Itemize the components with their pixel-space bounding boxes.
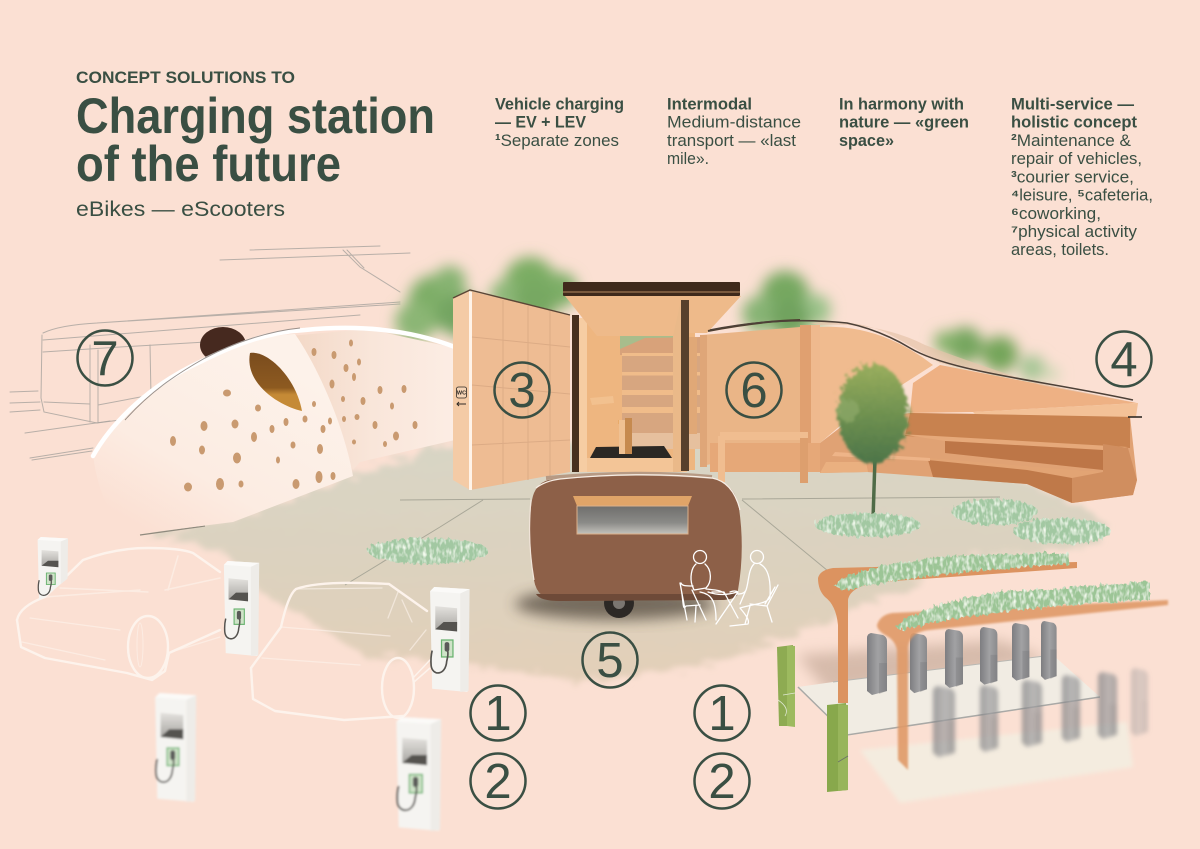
text column: intermodal: mile».: [667, 149, 709, 168]
canopy two: [877, 600, 1168, 770]
text column: multi-service: ³courier service,: [1011, 167, 1134, 186]
numbered marker 5: 5: [596, 634, 624, 688]
numbered marker 3: 3: [508, 364, 536, 418]
green bike chargers: [777, 645, 848, 792]
rear platform: [798, 655, 1100, 735]
numbered marker 2 left: [470, 754, 526, 809]
text column: multi-service: ⁴leisure, ⁵cafeteria,: [1011, 186, 1153, 205]
numbered marker 6: [726, 362, 782, 418]
text column: intermodal: Intermodal: [667, 94, 752, 114]
title block: [76, 68, 435, 221]
text column: harmony with nature: nature — «green: [839, 113, 969, 132]
charger unit 4: [155, 693, 196, 802]
numbered marker 7: [78, 330, 132, 386]
building: central pavilion with shelves: [563, 282, 741, 472]
numbered marker 3: [494, 362, 550, 418]
charger unit 1: [38, 537, 68, 598]
charger unit 5: [396, 717, 441, 831]
canopy one: [818, 562, 1077, 703]
numbered marker 1 right: 1: [708, 687, 736, 741]
LEV shelter with green roofs: [777, 552, 1168, 803]
text column: multi-service: holistic concept: [1011, 113, 1137, 132]
sketch: electric bus and overhead wires: [10, 246, 410, 460]
text column: multi-service: [1011, 94, 1153, 259]
numbered marker 2 right: [694, 754, 750, 809]
numbered marker 6: 6: [740, 364, 768, 418]
numbered marker 1 left: 1: [484, 687, 512, 741]
text column: multi-service: ²Maintenance &: [1011, 131, 1132, 150]
numbered marker 4: [1096, 332, 1152, 387]
main heading: of the future: [76, 136, 341, 192]
building: green roof amphitheatre: [710, 321, 1142, 503]
numbered marker 1 left: [470, 686, 526, 741]
text column: intermodal: Medium-distance: [667, 113, 801, 132]
grass patches: [368, 499, 1111, 564]
text column: multi-service: areas, toilets.: [1011, 240, 1109, 259]
text column: multi-service: ⁶coworking,: [1011, 204, 1101, 223]
trees behind the buildings: [395, 257, 1059, 381]
building: perforated white dome: [93, 327, 457, 535]
text column: harmony with nature: space»: [839, 131, 894, 150]
tree in front of amphitheatre: [837, 364, 908, 520]
numbered marker 1 right: [694, 686, 750, 741]
scooter row front: [933, 668, 1148, 757]
main heading: [76, 88, 435, 192]
text column: multi-service: ⁷physical activity: [1011, 222, 1137, 241]
ground plaza: [140, 441, 1115, 682]
subtitle: eBikes — eScooters: [76, 197, 285, 221]
text column: harmony with nature: [839, 94, 969, 150]
text column: harmony with nature: In harmony with: [839, 94, 964, 114]
icon: WC sign with arrow: WC: [457, 390, 466, 396]
text column: vehicle charging: — EV + LEV: [495, 113, 587, 132]
charger unit 3: [430, 587, 470, 692]
main heading: Charging station: [76, 88, 435, 144]
scooter row rear: [867, 621, 1057, 695]
numbered marker 2 right: 2: [708, 755, 736, 809]
building: courier locker panel: [453, 290, 570, 490]
sketch: electric car two: [251, 583, 430, 720]
text column: intermodal: transport — «last: [667, 131, 796, 150]
caravan cafeteria: [515, 474, 742, 620]
numbered marker 2 left: 2: [484, 755, 512, 809]
sketch: people at cafe table: [680, 550, 778, 626]
roof grass: [834, 552, 1150, 630]
eyebrow: CONCEPT SOLUTIONS TO: [76, 68, 295, 87]
text column: intermodal: [667, 94, 801, 168]
building: coworking block with bench: [700, 320, 820, 483]
text column: vehicle charging: ¹Separate zones: [495, 131, 619, 150]
front platform: [860, 722, 1133, 803]
sketch: electric car one: [17, 548, 220, 680]
text column: multi-service: Multi-service —: [1011, 94, 1134, 114]
text column: multi-service: repair of vehicles,: [1011, 149, 1142, 168]
numbered marker 7: 7: [91, 332, 119, 386]
text column: vehicle charging: [495, 94, 624, 150]
charger unit 2: [224, 561, 259, 656]
numbered marker 5: [582, 632, 638, 688]
EV charging stations: [38, 537, 470, 831]
text column: vehicle charging: Vehicle charging: [495, 94, 624, 114]
icon: WC sign with arrow: [456, 387, 466, 406]
numbered marker 4: 4: [1110, 333, 1138, 387]
